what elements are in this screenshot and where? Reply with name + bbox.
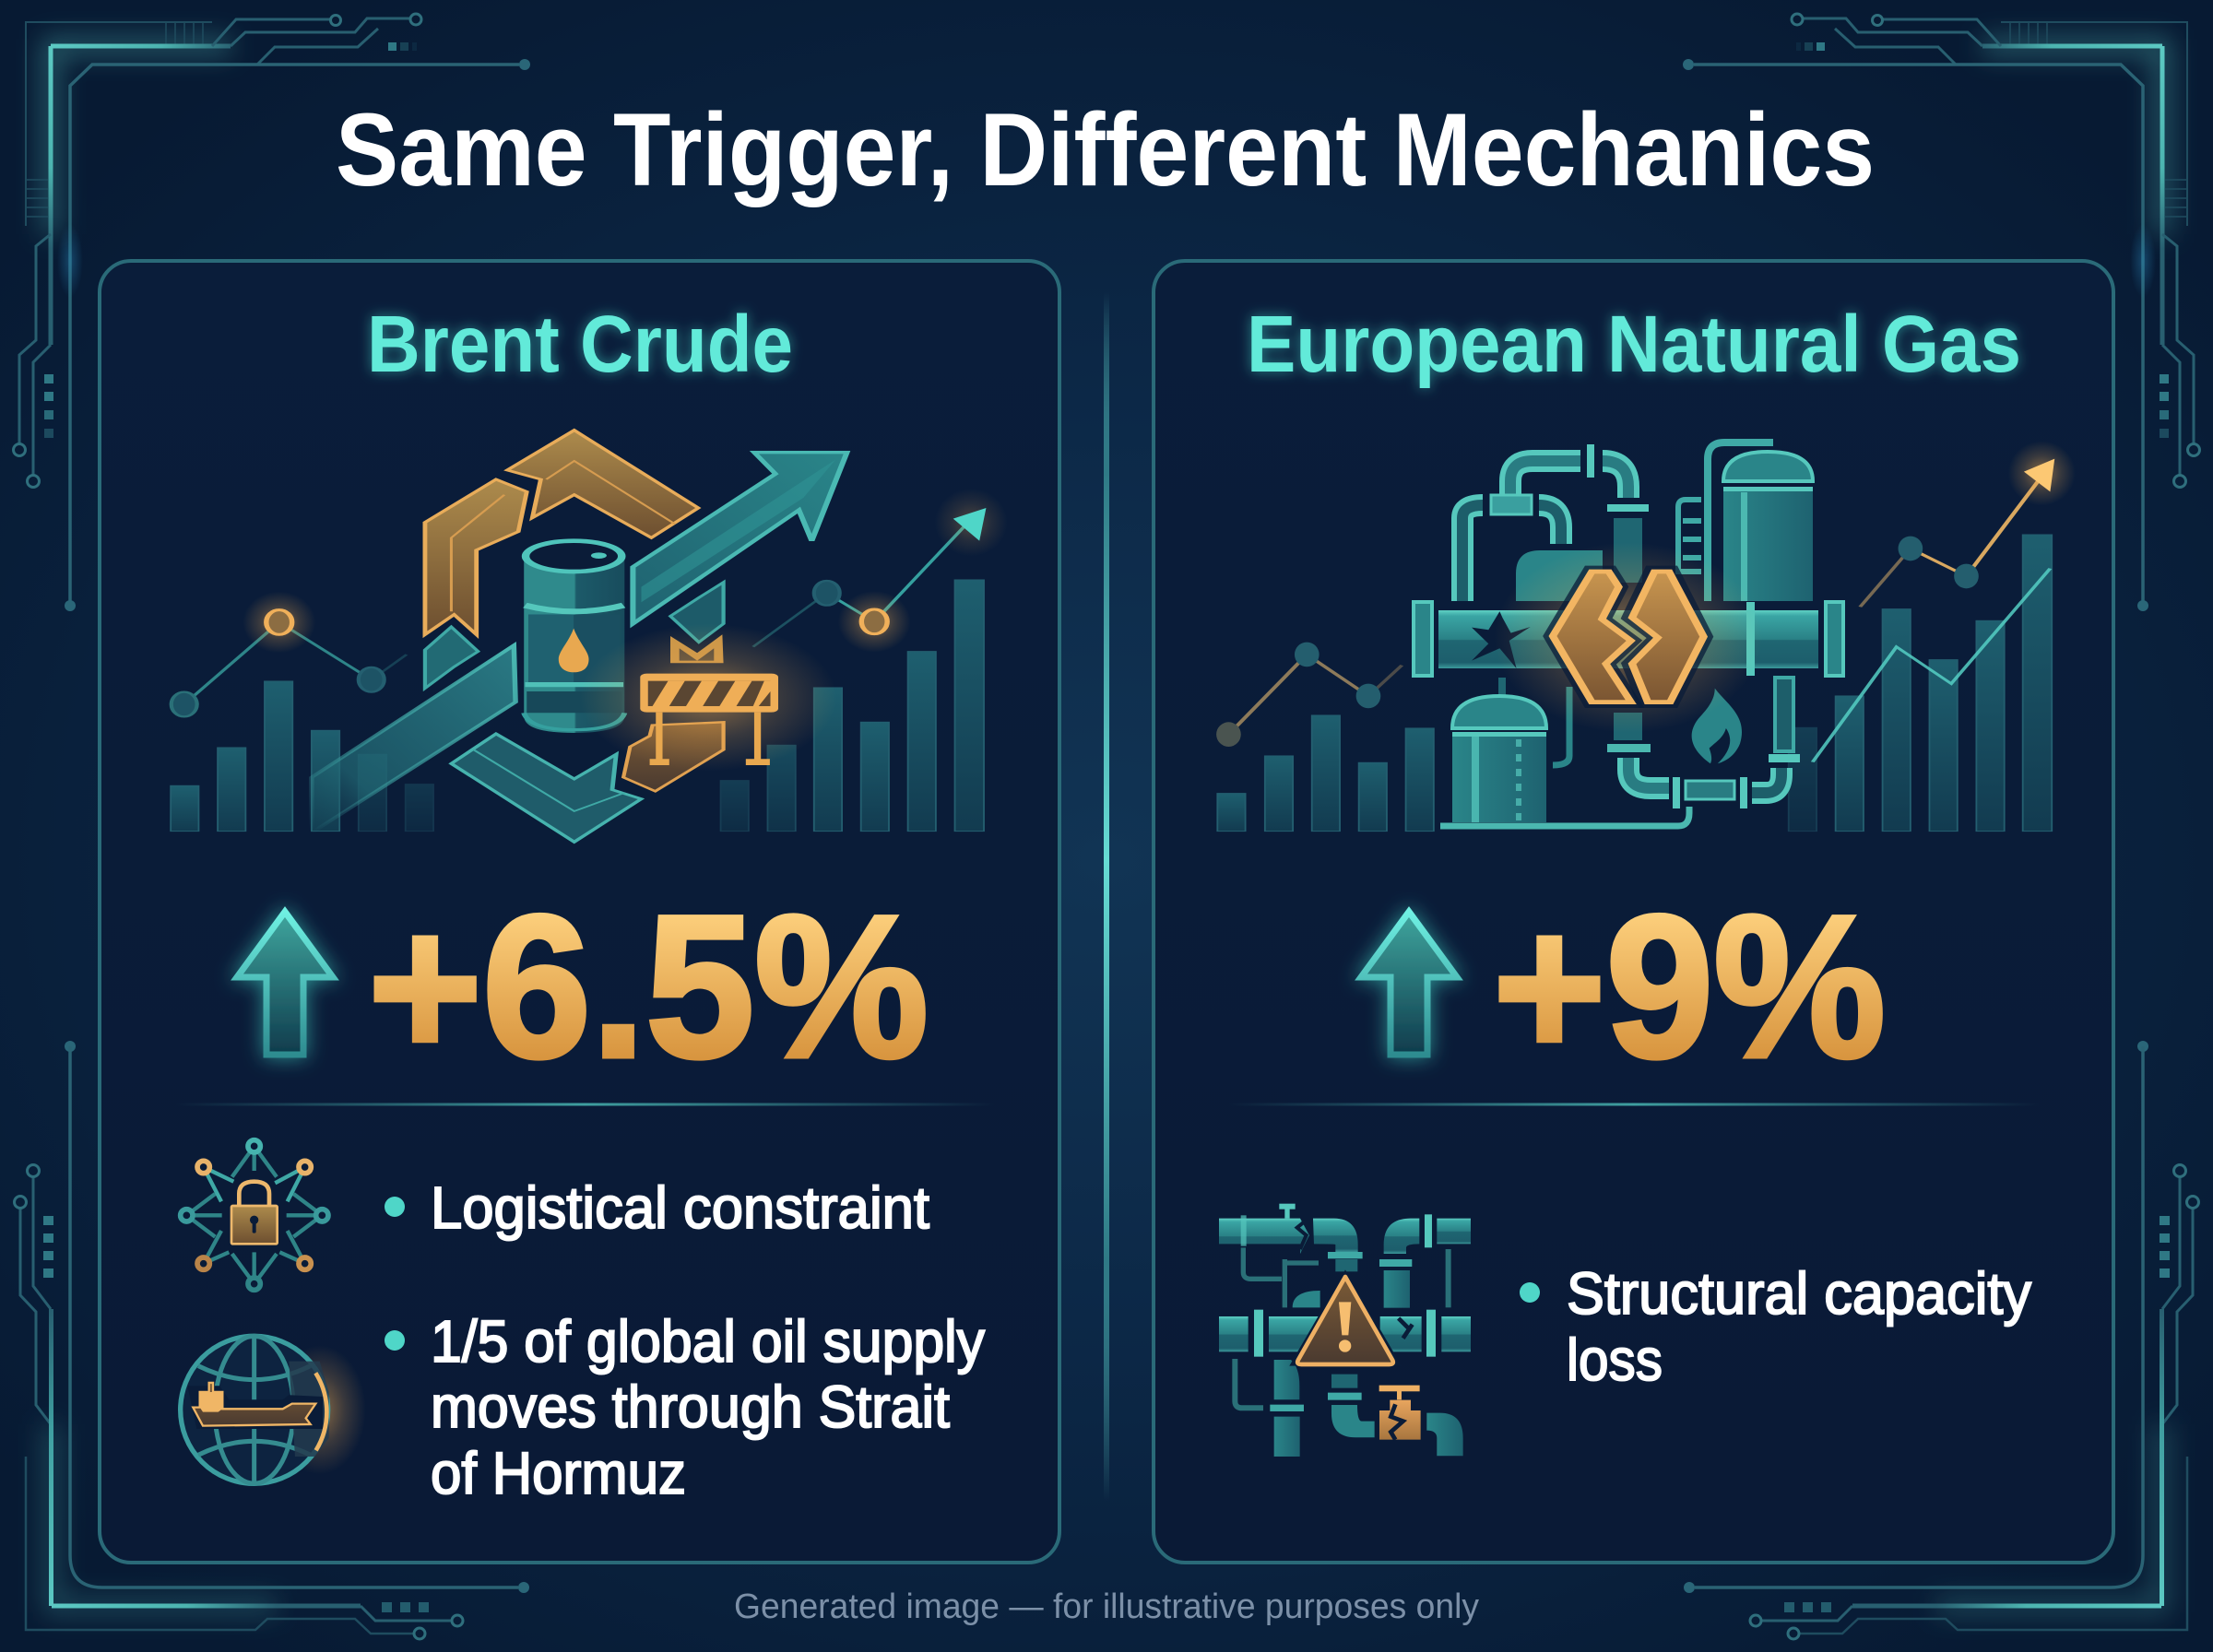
bullet: logistical constraint: Logistical constraint — [431, 1174, 929, 1241]
divider — [1228, 1103, 2040, 1106]
up arrow — [237, 912, 333, 1055]
pipes and tanks — [1414, 442, 1843, 826]
bullet: Strait of Hormuz: of Hormuz — [431, 1440, 686, 1506]
illustration: broken pipeline and rising chart — [1216, 441, 2076, 832]
bullet dot — [1520, 1282, 1540, 1303]
icon: globe and tanker — [181, 1336, 366, 1483]
heading: European Natural Gas: European Natural Gas — [1247, 300, 2021, 389]
heading: Brent Crude: Brent Crude — [367, 300, 793, 389]
chart bars and lines — [1216, 441, 2076, 832]
broken pipe joint and flame — [1472, 542, 1762, 763]
center divider — [1104, 292, 1109, 1501]
divider — [175, 1103, 995, 1106]
title: Same Trigger, Different Mechanics — [336, 92, 1875, 207]
panel: Brent Crude — [100, 261, 1059, 1563]
illustration: oil barrel, blockade and rising chart — [171, 431, 1007, 842]
bullet: structural capacity loss — [1567, 1260, 2031, 1393]
bullet: structural capacity loss: loss — [1567, 1327, 1663, 1393]
bullet dots — [385, 1197, 405, 1351]
circuit frame: left — [13, 14, 530, 1639]
icon: cracked pipes with warning triangle — [1219, 1204, 1471, 1457]
footer note: Generated image — for illustrative purposes only — [734, 1587, 1479, 1626]
bullet: Strait of Hormuz — [431, 1308, 985, 1506]
bullet: structural capacity loss: Structural capacity — [1567, 1260, 2031, 1327]
stat: +9%: +9% — [1493, 873, 1886, 1100]
up arrow — [1361, 912, 1457, 1055]
circuit frame: right — [1683, 14, 2200, 1639]
bullet: Strait of Hormuz: 1/5 of global oil supply — [431, 1308, 985, 1375]
panel: European Natural Gas — [1154, 261, 2113, 1563]
stat: +6.5%: +6.5% — [368, 873, 929, 1100]
icon: lock network — [181, 1140, 328, 1290]
bullet: Strait of Hormuz: moves through Strait — [431, 1374, 950, 1440]
